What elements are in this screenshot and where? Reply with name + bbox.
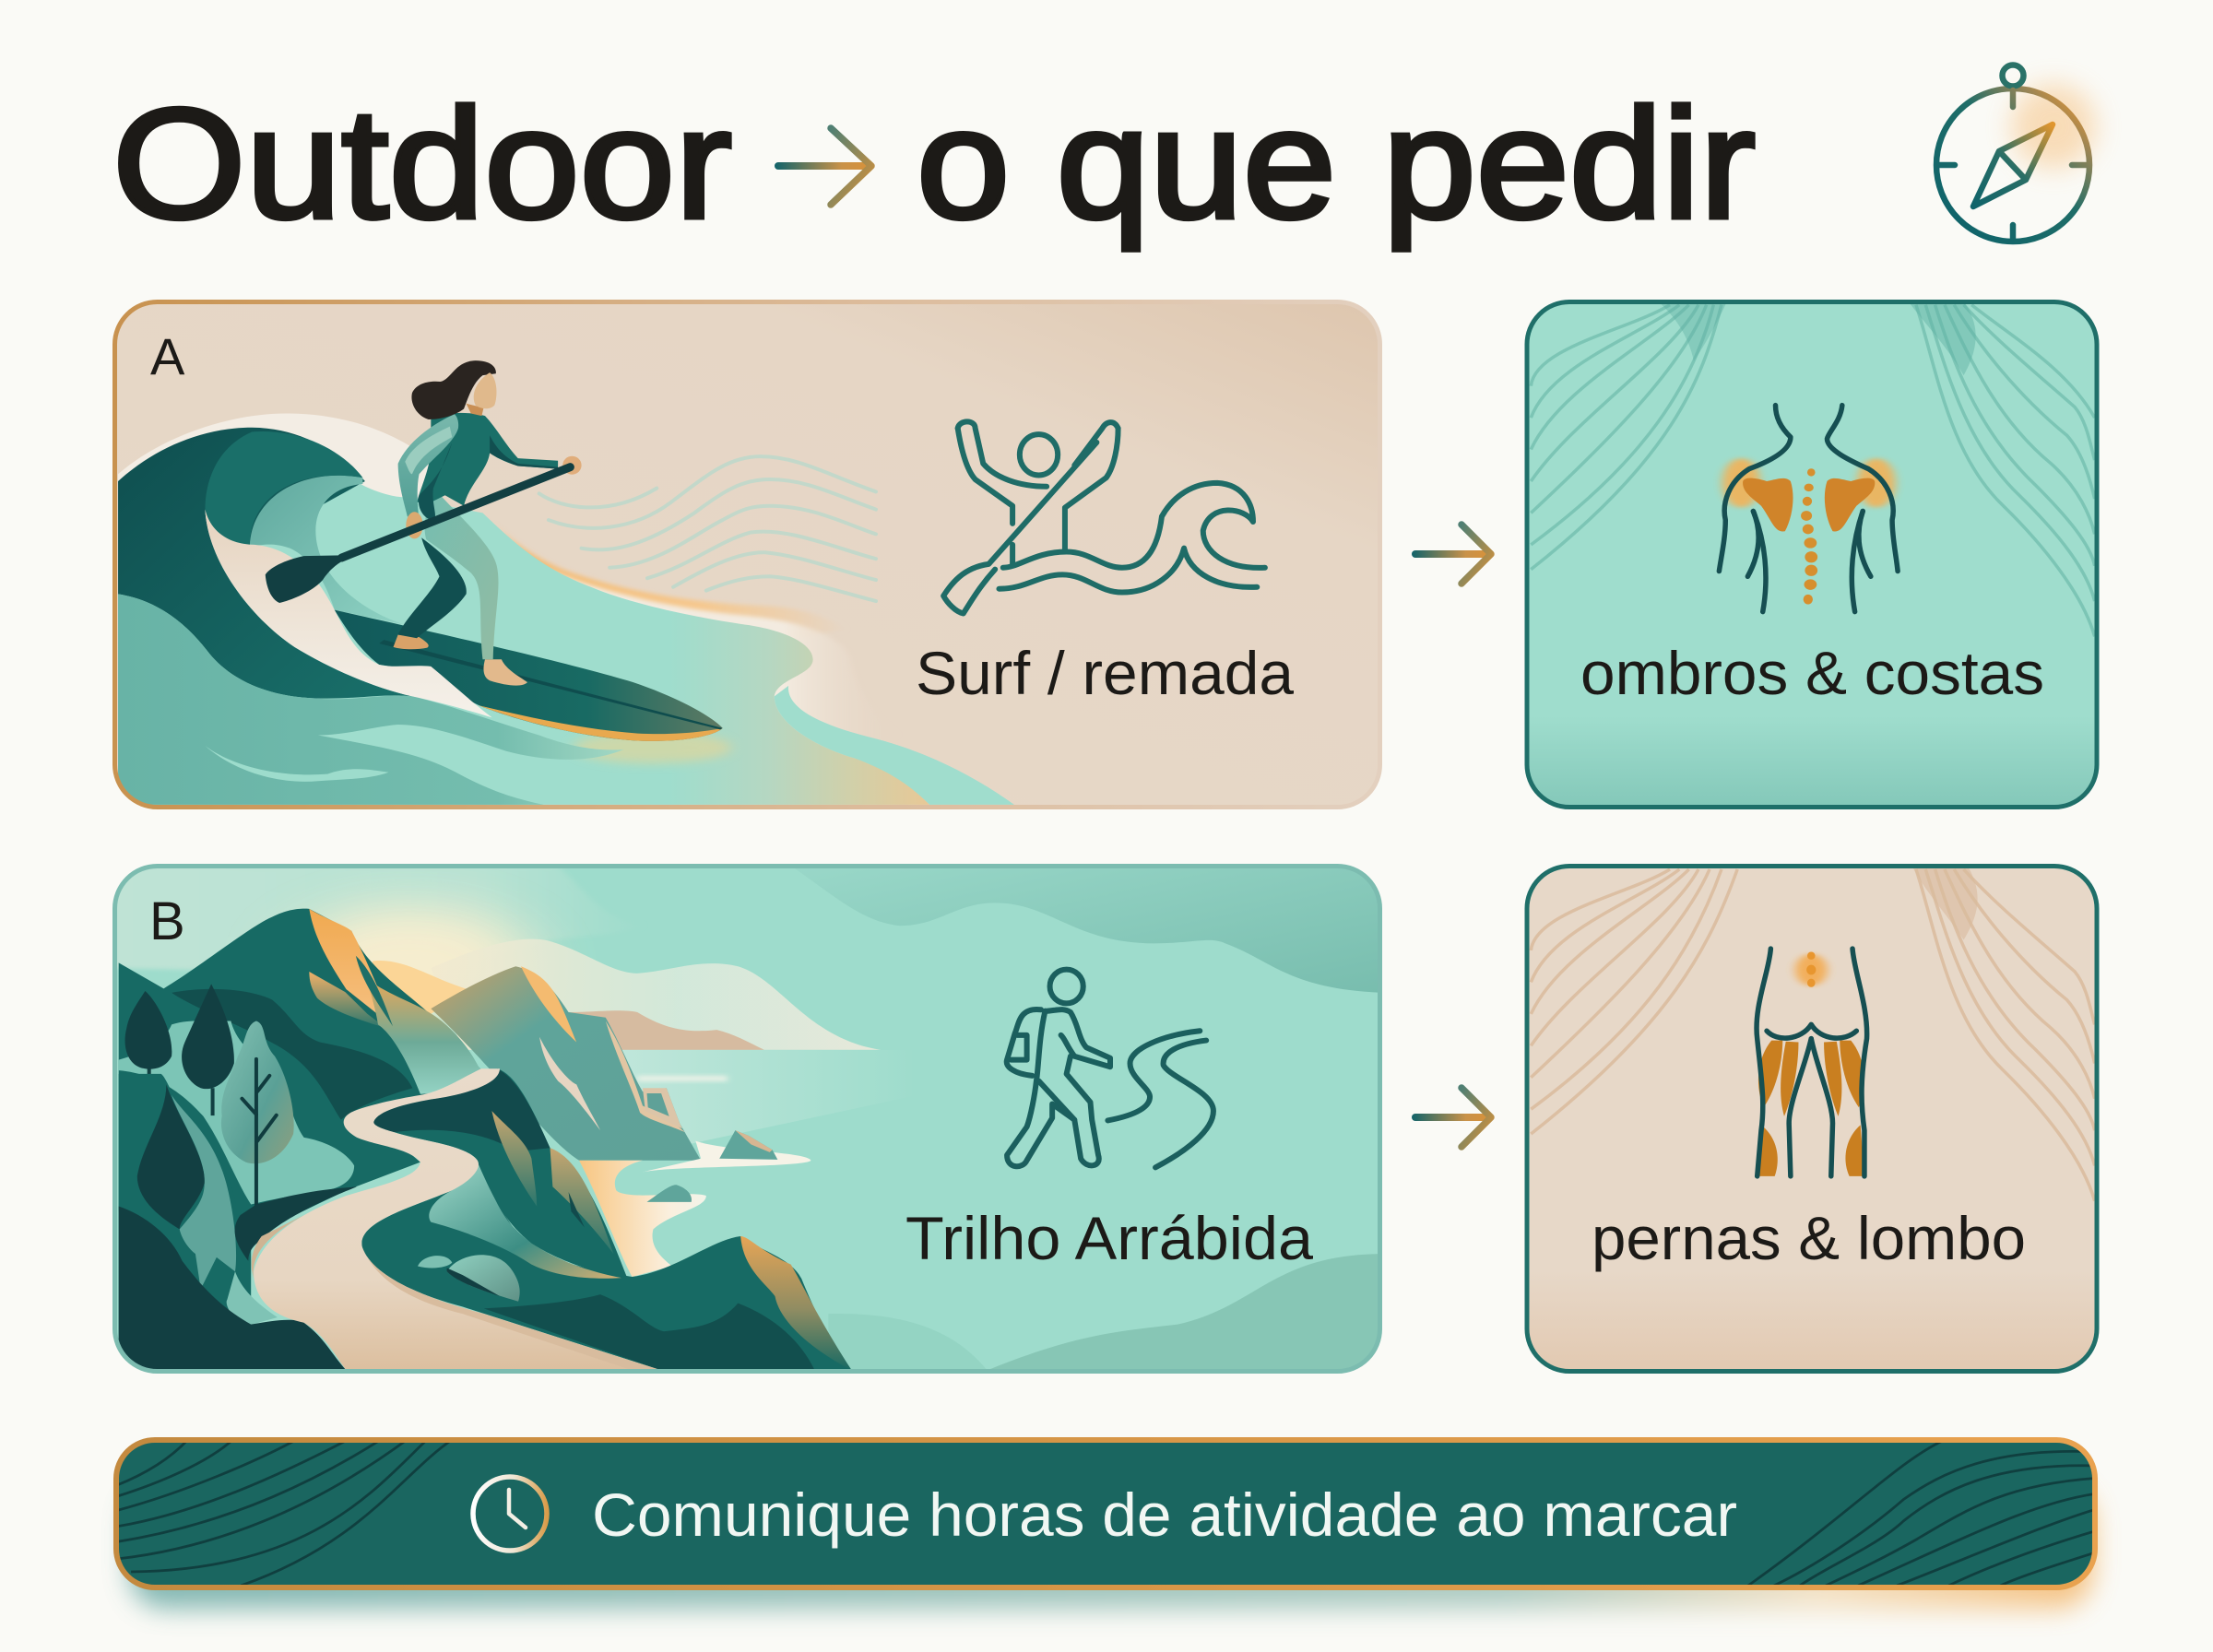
footer banner (112, 1438, 2098, 1609)
left foliage (118, 1073, 170, 1210)
label B: B (149, 891, 185, 951)
illustration: surfer on wave (118, 360, 1014, 805)
panel: ombros & costas (1527, 301, 2097, 808)
road (254, 1068, 661, 1370)
icon: hiker on path (1007, 970, 1213, 1167)
label: pernas & lombo: pernas & lombo (1592, 1204, 2026, 1272)
muscle fibre lines (1531, 866, 2095, 1201)
title (112, 77, 1756, 252)
illustration: coastal trail (113, 866, 917, 1370)
label: ombros & costas: ombros & costas (1580, 639, 2044, 707)
surfer figure (266, 360, 582, 686)
title: Outdoor (112, 77, 732, 252)
wind lines (539, 456, 876, 601)
icon: back and shoulders (1719, 406, 1898, 612)
icon: compass (1936, 65, 2096, 242)
footer text: Comunique horas de atividade ao marcar (592, 1481, 1737, 1549)
panel A: surf scene (114, 302, 1379, 808)
wave lines (112, 1438, 2098, 1586)
label: Trilho Arrábida: Trilho Arrábida (905, 1204, 1313, 1272)
arrow B (1412, 1088, 1491, 1147)
title: o que pedir (917, 77, 1756, 252)
icon: clock (473, 1477, 547, 1551)
icon: paddler in waves (943, 421, 1265, 613)
panel B: Arrábida trail scene (113, 862, 1384, 1372)
lower rocks (361, 1189, 849, 1369)
boulders (418, 1256, 452, 1268)
main cliff (119, 909, 482, 1368)
panel: pernas & lombo (1527, 866, 2097, 1372)
trees (125, 984, 294, 1205)
icon: legs and lower back (1757, 949, 1867, 1176)
arrow A (1412, 525, 1491, 584)
muscle fibre lines (1531, 301, 2095, 636)
label A: A (150, 327, 185, 385)
dark cliff (373, 1068, 627, 1277)
label: Surf / remada: Surf / remada (916, 639, 1294, 707)
title arrow (775, 128, 871, 205)
background waves (786, 862, 1384, 1370)
